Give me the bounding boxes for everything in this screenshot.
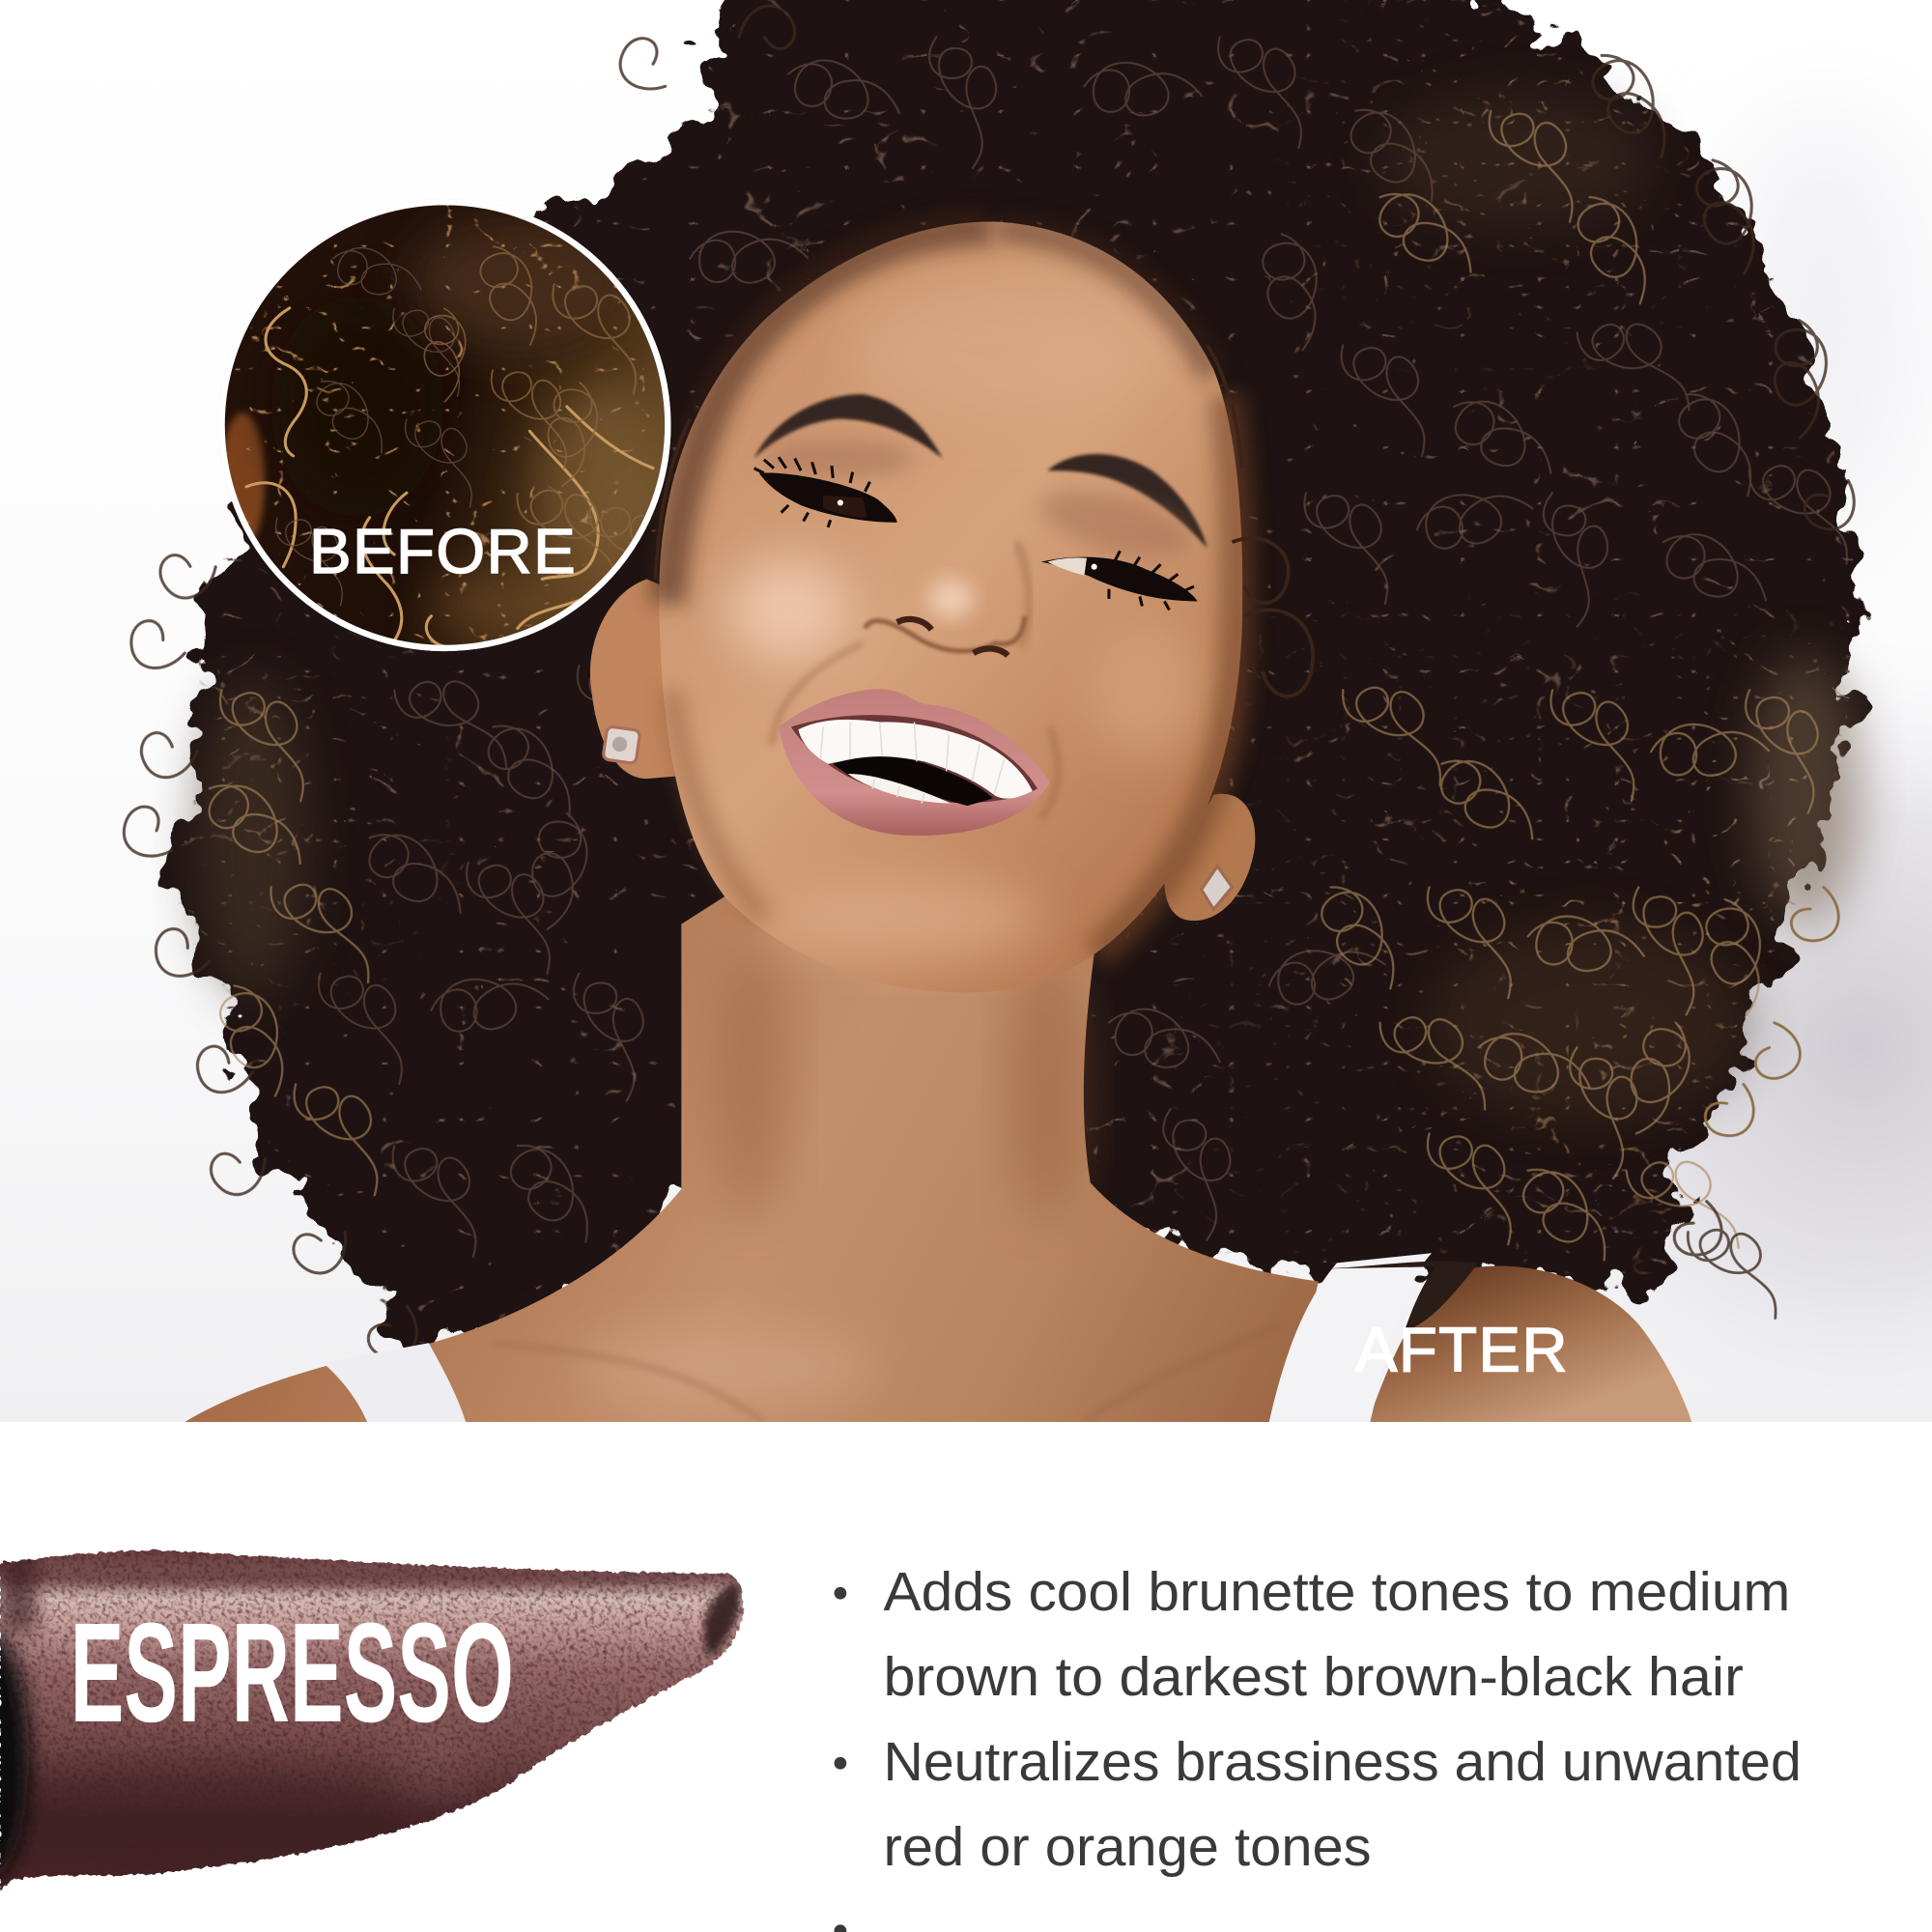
bullet two: red or orange tones bbox=[884, 1816, 1372, 1877]
curl strands across hair bbox=[120, 0, 1859, 1365]
nose bbox=[865, 542, 1029, 656]
swatch name: ESPRESSO bbox=[71, 1594, 514, 1752]
bullet one: brown to darkest brown-black hair bbox=[884, 1646, 1744, 1707]
right eye bbox=[1041, 551, 1198, 610]
photo: smiling woman with curly hair bbox=[0, 0, 1932, 1422]
tank top right strap bbox=[1269, 1253, 1432, 1422]
left ear bbox=[590, 579, 675, 779]
left eyebrow bbox=[754, 394, 943, 458]
hair strands over face edge bbox=[656, 345, 1313, 696]
swatch smear bbox=[0, 1540, 764, 1897]
smile lines bbox=[771, 643, 1058, 819]
face bbox=[659, 221, 1242, 992]
bullet one: Adds cool brunette tones to medium bbox=[884, 1561, 1790, 1622]
left eye bbox=[754, 457, 897, 527]
before label: BEFORE bbox=[309, 516, 576, 586]
right eyebrow bbox=[1047, 454, 1208, 549]
inset hair close-up bbox=[219, 200, 671, 650]
background wall bbox=[0, 0, 1932, 1422]
hair mass bbox=[124, 0, 1910, 1355]
hair texture bbox=[124, 0, 1910, 1355]
bullet one bbox=[835, 1561, 1790, 1707]
eye shadow bbox=[761, 439, 1196, 570]
bullet two bbox=[835, 1731, 1802, 1877]
tank top left strap bbox=[323, 1343, 466, 1422]
hair lock over strap bbox=[1306, 1262, 1479, 1331]
bullet three, cropped bbox=[835, 1924, 846, 1932]
right shoulder bbox=[1368, 1265, 1691, 1422]
benefit list bbox=[835, 1561, 1802, 1932]
espresso swatch bbox=[0, 1540, 764, 1897]
before inset circle bbox=[219, 200, 671, 650]
inset white ring bbox=[222, 202, 668, 648]
right earring bbox=[1202, 867, 1233, 909]
inset border bbox=[219, 200, 670, 650]
left earring bbox=[603, 726, 640, 764]
bullet two: Neutralizes brassiness and unwanted bbox=[884, 1731, 1802, 1792]
right ear bbox=[1164, 794, 1255, 921]
neck and chest bbox=[185, 863, 1319, 1422]
after label: AFTER bbox=[1355, 1315, 1567, 1385]
mouth bbox=[779, 689, 1050, 836]
